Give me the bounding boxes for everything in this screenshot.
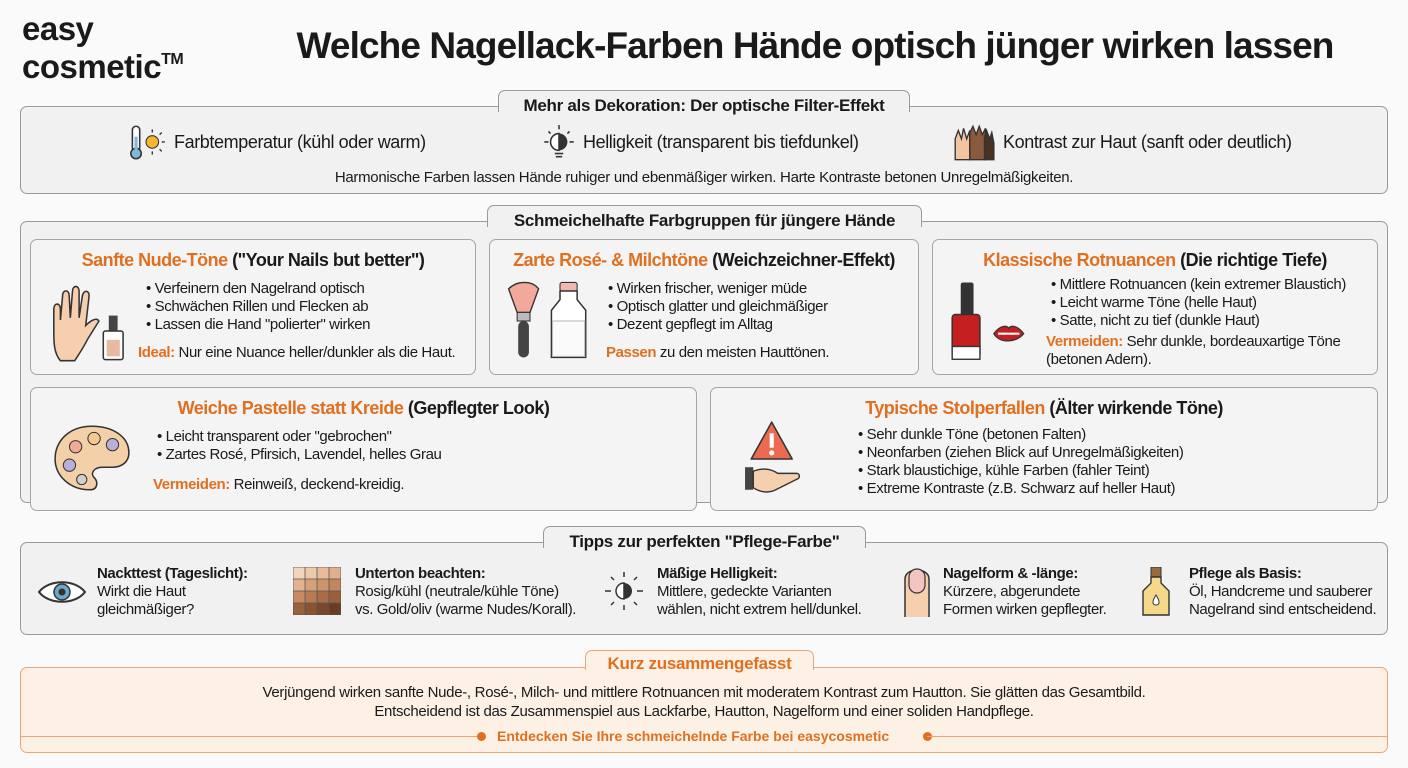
card: Rotnuancen: Leicht warme Töne (helle Haut) xyxy=(1060,294,1257,311)
tip: Nagelform: Kürzere, abgerundete xyxy=(943,583,1080,600)
panel: optischer Filter-Effekt xyxy=(20,106,1388,194)
tip: Helligkeit: Mittlere, gedeckte Varianten xyxy=(657,583,831,600)
icon: eye xyxy=(38,581,86,603)
card: Nude-Töne: Sanfte Nude-Töne ("Your Nails but better") xyxy=(82,250,424,270)
tip: Nacktest: Nackttest (Tageslicht): xyxy=(97,565,248,582)
heading: Tipps: Tipps zur perfekten "Pflege-Farbe" xyxy=(569,532,840,551)
icon: brush and milk xyxy=(508,282,586,358)
logo xyxy=(22,10,183,85)
card: Nude-Töne: Schwächen Rillen und Flecken ab xyxy=(155,298,368,315)
card: Rotnuancen: Mittlere Rotnuancen (kein extremer Blaustich) xyxy=(1060,276,1346,293)
tip: Helligkeit: wählen, nicht extrem hell/dunkel. xyxy=(657,601,861,618)
card: Stolperfallen: Neonfarben (ziehen Blick auf Unregelmäßigkeiten) xyxy=(867,444,1183,461)
heading: Kurz zusammengefasst: Kurz zusammengefasst xyxy=(608,654,791,673)
tip: Nacktest xyxy=(38,565,248,618)
tip: Unterton: Unterton beachten: xyxy=(355,565,485,582)
card: Pastelle xyxy=(30,387,697,511)
item: Helligkeit: Helligkeit (transparent bis tiefdunkel) xyxy=(583,132,859,152)
tip: Unterton: vs. Gold/oliv (warme Nudes/Korall). xyxy=(355,601,576,618)
icon: half sun xyxy=(605,572,643,610)
card: Nude-Töne xyxy=(30,239,476,375)
card: Nude-Töne: Verfeinern den Nagelrand optisch xyxy=(155,280,364,297)
heading: Kurz zusammengefasst xyxy=(585,650,814,670)
text: summary xyxy=(262,684,1146,720)
icon: hands xyxy=(954,124,995,160)
tip: Pflege: Öl, Handcreme und sauberer xyxy=(1189,583,1372,600)
tip: Nacktest: Wirkt die Haut xyxy=(97,583,186,600)
heading: Mehr als Dekoration: Mehr als Dekoration: Der optische Filter-Effekt xyxy=(524,96,884,115)
heading: Schmeichelhafte Farbgruppen xyxy=(487,205,922,227)
card: Rotnuancen xyxy=(932,239,1378,375)
tip: Pflege xyxy=(1142,565,1376,618)
panel: Kurz zusammengefasst xyxy=(20,667,1388,753)
card: Rosé & Milch: Passen zu den meisten Hauttönen. xyxy=(606,344,829,361)
panel: Farbgruppen xyxy=(20,221,1388,503)
card: Pastelle: Weiche Pastelle statt Kreide (Gepflegter Look) xyxy=(178,398,549,418)
tip: Helligkeit xyxy=(605,565,861,618)
icon: hand with polish xyxy=(53,286,124,362)
card: Nude-Töne: Ideal: Nur eine Nuance heller/dunkler als die Haut. xyxy=(138,344,455,361)
logo: easy xyxy=(22,10,93,47)
card: Rosé & Milch xyxy=(489,239,919,375)
tip: Unterton: Rosig/kühl (neutrale/kühle Töne) xyxy=(355,583,559,600)
tip: Pflege: Pflege als Basis: xyxy=(1189,565,1301,582)
tip: Nagelform xyxy=(904,565,1106,618)
item: Kontrast xyxy=(954,124,1292,160)
card: Pastelle: Leicht transparent oder "gebrochen" xyxy=(166,428,392,445)
icon: bulb xyxy=(544,125,574,158)
icon: skin tone grid xyxy=(293,567,341,615)
icon: warning hand xyxy=(745,421,800,493)
tip: Unterton xyxy=(293,565,576,618)
card: Rotnuancen: Satte, nicht zu tief (dunkle Haut) xyxy=(1060,312,1259,329)
icon: finger nail xyxy=(904,568,930,617)
text: summary line: Harmonische Farben lassen Hände ruhiger und ebenmäßiger wirken. Harte Kontraste betonen Unregelmäßigkeiten. xyxy=(335,169,1073,186)
card: Rosé & Milch: Optisch glatter und gleichmäßiger xyxy=(617,298,828,315)
call to action: Entdecken Sie Ihre schmeichelnde Farbe bei easycosmetic xyxy=(497,728,889,744)
tip: Pflege: Nagelrand sind entscheidend. xyxy=(1189,601,1376,618)
card: Stolperfallen xyxy=(710,387,1378,511)
card: Stolperfallen: Typische Stolperfallen (Älter wirkende Töne) xyxy=(865,398,1223,418)
card: Rotnuancen: Klassische Rotnuancen (Die richtige Tiefe) xyxy=(983,250,1327,270)
heading: Tipps xyxy=(543,526,866,548)
icon: red polish and lips xyxy=(951,282,1024,360)
card: Pastelle: Vermeiden: Reinweiß, deckend-kreidig. xyxy=(153,476,404,493)
call to action xyxy=(21,728,1387,744)
card: Pastelle: Zartes Rosé, Pfirsich, Lavendel, helles Grau xyxy=(166,446,442,463)
text: summary: Verjüngend wirken sanfte Nude-, Rosé-, Milch- und mittlere Rotnuancen mit moderatem Kontrast zum Hautton. Sie glätten das Gesamtbild. xyxy=(262,684,1146,701)
item: Farbtemperatur: Farbtemperatur (kühl oder warm) xyxy=(174,132,426,152)
icon: palette xyxy=(54,426,130,490)
icon: thermometer sun xyxy=(130,126,165,160)
card: Stolperfallen: Sehr dunkle Töne (betonen Falten) xyxy=(867,426,1086,443)
card: Rosé & Milch: Zarte Rosé- & Milchtöne (Weichzeichner-Effekt) xyxy=(513,250,895,270)
item: Farbtemperatur xyxy=(130,126,426,160)
tip: Nacktest: gleichmäßiger? xyxy=(97,601,194,618)
item: Helligkeit xyxy=(544,125,859,158)
card: Rotnuancen: Vermeiden: Sehr dunkle, bordeauxartige Töne (betonen Adern). xyxy=(1046,333,1340,368)
item: Kontrast: Kontrast zur Haut (sanft oder deutlich) xyxy=(1003,132,1292,152)
tip: Nagelform: Nagelform & -länge: xyxy=(943,565,1078,582)
card: Rosé & Milch: Dezent gepflegt im Alltag xyxy=(617,316,773,333)
panel: Tipps xyxy=(20,542,1388,635)
heading: Schmeichelhafte Farbgruppen: Schmeichelhafte Farbgruppen für jüngere Hände xyxy=(514,211,895,230)
heading: Mehr als Dekoration xyxy=(498,90,910,112)
card: Stolperfallen: Extreme Kontraste (z.B. Schwarz auf heller Haut) xyxy=(867,480,1175,497)
logo: cosmeticTM xyxy=(22,48,183,85)
card: Nude-Töne: Lassen die Hand "polierter" wirken xyxy=(155,316,370,333)
tip: Nagelform: Formen wirken gepflegter. xyxy=(943,601,1106,618)
card: Rosé & Milch: Wirken frischer, weniger müde xyxy=(617,280,807,297)
card: Stolperfallen: Stark blaustichige, kühle Farben (fahler Teint) xyxy=(867,462,1149,479)
icon: oil bottle xyxy=(1142,567,1170,616)
title: Welche Nagellack-Farben Hände optisch jünger wirken lassen xyxy=(297,25,1333,66)
tip: Helligkeit: Mäßige Helligkeit: xyxy=(657,565,777,582)
text: summary: Entscheidend ist das Zusammenspiel aus Lackfarbe, Hautton, Nagelform und einer soliden Handpflege. xyxy=(374,703,1034,720)
